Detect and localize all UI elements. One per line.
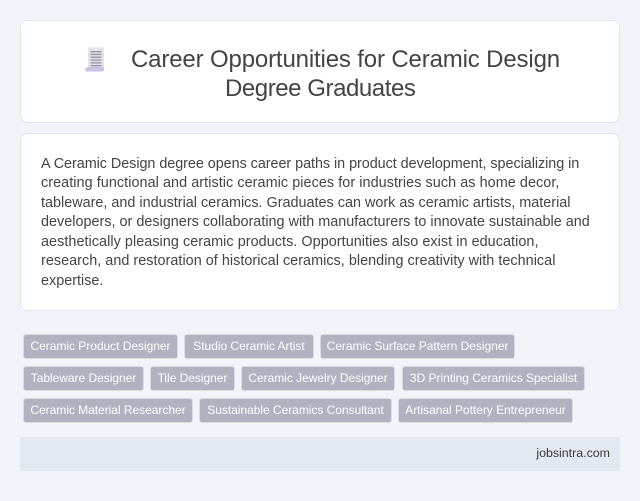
tag <box>199 398 392 423</box>
description text: research, and restoration of historical ceramics, blending creativity with technical <box>41 253 555 269</box>
tag: Studio Ceramic Artist <box>193 339 305 353</box>
tag: 3D Printing Ceramics Specialist <box>410 371 577 385</box>
title: Career Opportunities for Ceramic Design <box>131 46 560 73</box>
title: Degree Graduates <box>225 75 415 102</box>
tag <box>241 366 395 391</box>
tag: Artisanal Pottery Entrepreneur <box>405 403 566 417</box>
description text: A Ceramic Design degree opens career paths in product development, specializing in <box>41 156 579 172</box>
tag: Tile Designer <box>158 371 227 385</box>
tag: Tableware Designer <box>31 371 136 385</box>
tag <box>150 366 235 391</box>
footer bar <box>20 437 620 471</box>
tag: Sustainable Ceramics Consultant <box>207 403 384 417</box>
icon: paper scroll <box>85 47 104 72</box>
footer source text: jobsintra.com <box>536 446 610 460</box>
tag: Ceramic Material Researcher <box>30 403 186 417</box>
description text <box>41 156 590 289</box>
description text: creating functional and artistic ceramic pieces for industries such as home decor, <box>41 175 559 191</box>
title <box>131 46 560 102</box>
tag <box>402 366 585 391</box>
tag: Ceramic Product Designer <box>30 339 170 353</box>
tag <box>320 334 515 359</box>
description text: aesthetically pleasing ceramic products. Opportunities also exist in education, <box>41 234 538 250</box>
panel: career tags <box>23 334 585 423</box>
tag: Ceramic Surface Pattern Designer <box>327 339 508 353</box>
description text: tableware, and industrial ceramics. Graduates can work as ceramic artists, material <box>41 195 570 211</box>
tag <box>398 398 573 423</box>
tag <box>184 334 314 359</box>
tag <box>23 366 144 391</box>
tag <box>23 398 193 423</box>
tag: Ceramic Jewelry Designer <box>248 371 388 385</box>
panel: header card <box>20 20 620 123</box>
panel: description card <box>20 133 620 311</box>
description text: developers, or designers collaborating with manufacturers to innovate sustainable and <box>41 214 590 230</box>
description text: expertise. <box>41 273 103 289</box>
tag <box>23 334 178 359</box>
